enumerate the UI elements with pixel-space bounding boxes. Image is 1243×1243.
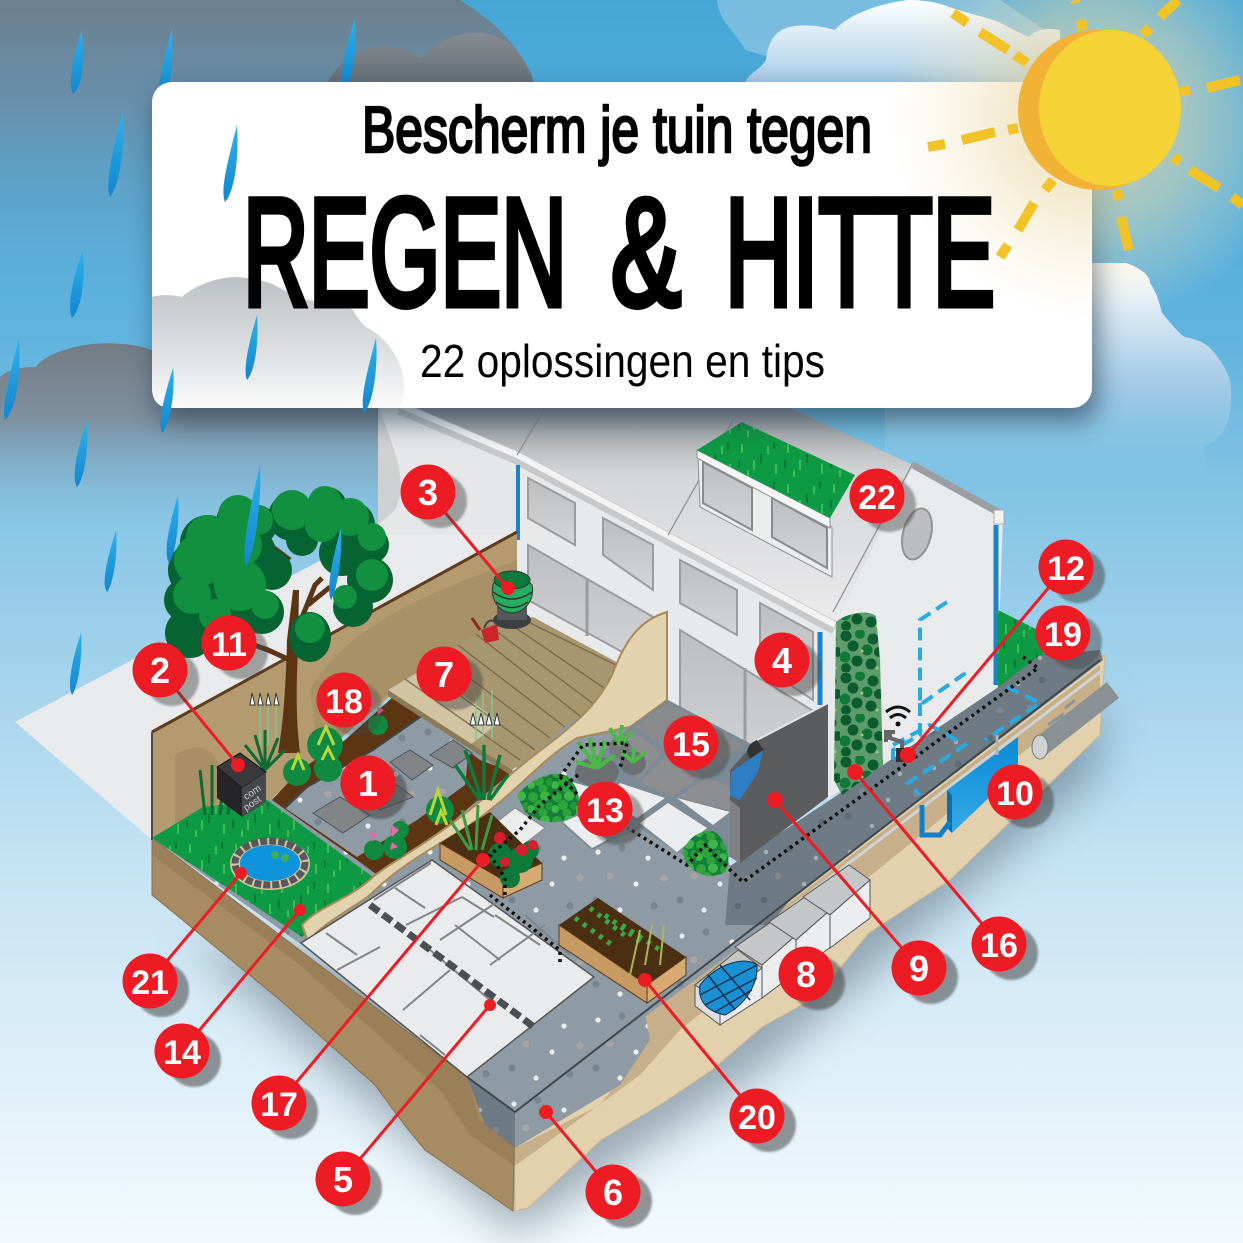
climbing ivy — [834, 613, 883, 795]
title ampersand: & — [611, 167, 681, 338]
marker 15: 15 — [672, 726, 710, 764]
plants in the border — [200, 690, 508, 860]
neighbour lawn far right — [998, 610, 1048, 690]
gable wall — [830, 465, 1003, 797]
marker 1 — [340, 756, 407, 819]
tiles near house — [493, 700, 753, 860]
grey cloud on the card — [152, 277, 404, 408]
marker 8: 8 — [796, 954, 816, 995]
marker 9: 9 — [909, 948, 929, 989]
marker 19: 19 — [1044, 616, 1082, 654]
compost box: com — [242, 783, 264, 803]
marker 16 — [847, 764, 1038, 980]
marker 14: 14 — [163, 1034, 201, 1072]
soil block — [152, 655, 1105, 1211]
paving tiles — [301, 860, 594, 1077]
garden gravel — [285, 715, 472, 857]
neighbouring ground and wall — [15, 405, 520, 840]
round window — [897, 505, 937, 563]
cloud: dark rain cloud left — [0, 343, 380, 530]
cloud: white top right — [717, 0, 1060, 90]
drainage pipe — [1032, 690, 1113, 759]
cloud: dark rain cloud top left — [0, 0, 535, 300]
marker 14 — [154, 904, 306, 1087]
roof — [400, 408, 913, 628]
marker 3: 3 — [418, 472, 438, 513]
lawn — [152, 800, 377, 937]
front gravel face — [467, 660, 1100, 1148]
courtyard gravel — [432, 780, 770, 1112]
marker 4 — [754, 632, 821, 696]
marker 12 — [900, 540, 1105, 763]
herb hedge — [517, 774, 728, 876]
title word REGEN: REGEN — [243, 167, 567, 338]
marker 11 — [202, 616, 268, 679]
rain drops on the card — [161, 125, 377, 433]
marker 19 — [1036, 606, 1102, 669]
upper windows — [528, 478, 575, 545]
title line 1: Bescherm je tuin tegen — [362, 93, 872, 166]
subtitle: 22 oplossingen en tips — [420, 335, 825, 387]
water tank — [730, 703, 828, 863]
marker 21: 21 — [131, 964, 169, 1002]
marker 5: 5 — [333, 1159, 353, 1200]
marker 17: 17 — [260, 1086, 298, 1124]
marker 12: 12 — [1047, 550, 1085, 588]
gutter — [400, 408, 835, 628]
marker 1: 1 — [358, 763, 378, 804]
marker 16: 16 — [980, 927, 1018, 965]
marker 10 — [988, 764, 1054, 828]
marker 21 — [122, 867, 247, 1017]
rear facade — [517, 458, 833, 800]
marker 20: 20 — [738, 1099, 776, 1137]
marker 7 — [416, 646, 483, 710]
marker 18: 18 — [325, 683, 363, 721]
base of the garden — [152, 620, 770, 1112]
marker 17 — [252, 853, 490, 1139]
tree — [164, 486, 393, 753]
marker 15 — [664, 716, 730, 779]
garden wall — [152, 532, 517, 840]
marker 8 — [778, 946, 845, 1010]
marker 5 — [316, 999, 496, 1215]
house — [400, 405, 1004, 800]
deck — [388, 617, 622, 776]
marker 11: 11 — [211, 626, 247, 664]
marker 10: 10 — [996, 775, 1034, 813]
marker 18 — [316, 672, 383, 736]
pond — [230, 838, 310, 890]
marker 22 — [850, 468, 916, 532]
marker 20 — [638, 973, 796, 1152]
marker 22: 22 — [858, 479, 896, 517]
marker 13 — [578, 782, 644, 845]
plant pots — [575, 725, 646, 787]
marker 13: 13 — [586, 792, 624, 830]
marker 6: 6 — [603, 1172, 623, 1213]
watering can — [472, 618, 499, 643]
curved cream wall — [302, 612, 667, 942]
title card — [152, 0, 1243, 422]
sun glow — [890, 0, 1243, 320]
title word HITTE: HITTE — [725, 167, 995, 338]
marker 2 — [132, 642, 245, 772]
rain drops behind the card — [4, 18, 356, 695]
ground shadow — [190, 700, 1100, 1235]
smart tap with wifi symbol — [886, 707, 910, 762]
black dotted drip irrigation line — [490, 657, 1038, 965]
vegetable planter — [559, 898, 686, 1003]
sun — [928, 0, 1243, 257]
marker 4: 4 — [772, 640, 792, 681]
compost box — [217, 753, 266, 817]
marker 6 — [539, 1105, 652, 1228]
blue water buffer — [922, 735, 1018, 835]
gabion blocks — [695, 865, 870, 1025]
downpipes — [516, 465, 520, 540]
compost box: post — [242, 794, 264, 814]
cloud: white right — [885, 263, 1231, 490]
marker 2: 2 — [150, 650, 170, 691]
flower bed soil — [272, 697, 512, 877]
marker 7: 7 — [434, 654, 454, 695]
blue dashed underground pipes — [893, 602, 1040, 795]
dormer — [698, 457, 832, 577]
rain barrel — [492, 571, 533, 629]
planter with flowers — [440, 805, 542, 898]
marker 3 — [400, 464, 515, 595]
marker 9 — [767, 792, 958, 1004]
ground windows — [528, 545, 655, 670]
side path gravel — [725, 650, 1103, 925]
